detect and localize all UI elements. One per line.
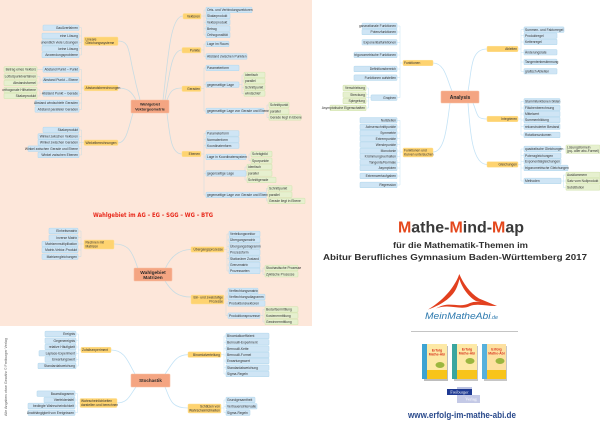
branch: Zufallsexperiment: Erwartungswert xyxy=(52,358,75,362)
branch: Ableiten: Summen- und Faktorregel xyxy=(525,28,564,32)
branch: Übergangsprozesse: Übergangsmatrix xyxy=(230,238,255,242)
branch: Punkte: Punkte xyxy=(190,48,200,52)
branch: Abstandsberechnungen: Lotfußpunktverfahren xyxy=(5,75,36,79)
branch: Schätzen von Wahrscheinlichkeiten: Schätzen von xyxy=(200,405,220,409)
logo: Freiburger Verlag xyxy=(447,387,480,403)
branch: Integrieren: Flächenberechnung xyxy=(525,106,554,110)
branch: Funktionen: Definitionsbereich xyxy=(370,67,396,71)
branch: Ebenen: Schnittgerade xyxy=(248,178,269,182)
branch: Integrieren: Stammfunktionen bilden xyxy=(525,99,561,103)
branch: Wahrscheinlichkeiten darstellen und berechnen: bedingte Wahrscheinlichkeit xyxy=(33,404,74,408)
icon: book 1: Erfolg xyxy=(432,348,442,352)
branch: Gleichungen: Exponentialgleichungen xyxy=(525,160,560,164)
branch: Ableiten: grafisch Ableiten xyxy=(525,69,549,73)
branch: Vektoren: Orts- und Verbindungsvektoren xyxy=(207,8,253,12)
mind map: Analysis xyxy=(322,23,600,190)
center node: Wahlgebiet Vektorgeometrie: Wahlgebiet xyxy=(140,103,161,107)
branch: Ein- und zweistufige Prozesse: Prozesse xyxy=(209,300,223,304)
branch: Ein- und zweistufige Prozesse xyxy=(191,288,298,325)
branch: Rechnen mit Matrizen: Matrix-Vektor-Produkt xyxy=(45,248,77,252)
branch: Funktionen und Kurven untersuchen: Wendepunkte xyxy=(376,143,396,147)
branch: Schätzen von Wahrscheinlichkeiten: Grundgesamtheit xyxy=(227,398,252,402)
branch: Ebenen: Schnittpunkt xyxy=(269,186,287,190)
logo: Freiburger Verlag: Verlag xyxy=(465,397,478,402)
branch: Lineare Gleichungssysteme: unendlich viele Lösungen xyxy=(41,41,78,45)
icon: book 3 xyxy=(482,344,507,381)
branch: Wahrscheinlichkeiten darstellen und berechnen: Baumdiagramm xyxy=(51,392,74,396)
icon: book 2: Mathe-Abi xyxy=(459,352,475,356)
branch: Rechnen mit Matrizen: Inverse Matrix xyxy=(56,236,77,240)
branch: Übergangsprozesse: Verteilungsvektor xyxy=(230,232,256,236)
branch: Funktionen und Kurven untersuchen: Nullstellen xyxy=(381,118,396,122)
branch: Funktionen xyxy=(322,23,433,111)
branch: Funktionen und Kurven untersuchen: Asymptoten xyxy=(379,166,396,170)
subtitle: line 2: Abitur Berufliches Gymnasium Baden-Württemberg 2017 xyxy=(323,253,588,262)
branch: Funktionen: Asymptotische Eigenschaften xyxy=(322,106,365,110)
branch: Punkte: Abstand zwischen Punkten xyxy=(207,55,247,59)
branch: Ein- und zweistufige Prozesse: Verflechtungsdiagramm xyxy=(229,295,264,299)
branch: Übergangsprozesse: Prozessarten xyxy=(230,269,250,273)
branch: Funktionen: trigonometrische Funktionen xyxy=(354,53,396,57)
branch: Winkelberechnungen: Skalarprodukt xyxy=(58,128,78,132)
branch: Funktionen und Kurven untersuchen: Achsenschnittpunkte xyxy=(366,125,396,129)
branch: Abstandsberechnungen: Abstandsberechnungen xyxy=(86,86,120,90)
branch: Schätzen von Wahrscheinlichkeiten: Wahrscheinlichkeiten xyxy=(189,409,220,413)
branch: Gleichungen: Lösungsformeln xyxy=(567,145,591,149)
branch: Übergangsprozesse: Stationärer Zustand xyxy=(230,257,259,261)
branch: Winkelberechnungen: Winkel zwischen Gerade und Ebene xyxy=(25,147,78,151)
center node: Wahlgebiet Vektorgeometrie xyxy=(131,100,169,113)
branch: Geraden: parallel xyxy=(245,79,256,83)
branch: Ebenen: Lage in Koordinatensystem xyxy=(207,155,247,159)
branch: Vektoren: Vektorprodukt xyxy=(207,20,227,24)
branch: Ebenen: identisch xyxy=(248,165,261,169)
branch: Ableiten: Ableiten xyxy=(505,47,517,51)
branch: Punkte: Lage im Raum xyxy=(207,42,229,46)
branch: Ein- und zweistufige Prozesse: Produktionsprozesse xyxy=(229,314,260,318)
branch: Integrieren: Rotationsvolumen xyxy=(525,133,552,137)
branch: Ebenen: Ebenen xyxy=(189,152,200,156)
branch: Geraden: Geraden xyxy=(187,87,200,91)
branch: Binomialverteilung: Erwartungswert xyxy=(227,359,250,363)
center node: Analysis xyxy=(441,91,479,103)
branch: Rechnen mit Matrizen: Matrizen xyxy=(86,245,98,249)
branch: Funktionen und Kurven untersuchen: Extremwertaufgaben xyxy=(366,174,396,178)
branch: Ebenen: gegenseitige Lage xyxy=(207,172,234,176)
branch: Lineare Gleichungssysteme xyxy=(41,25,118,58)
center node: Wahlgebiet Vektorgeometrie: Vektorgeometrie xyxy=(135,107,165,111)
branch: Ebenen xyxy=(182,131,305,204)
branch: Lineare Gleichungssysteme: Lineare xyxy=(86,37,97,41)
branch: Rechnen mit Matrizen: Einheitsmatrix xyxy=(56,229,77,233)
logo: Freiburger Verlag: Freiburger xyxy=(450,390,469,395)
branch: Funktionen: Streckung xyxy=(350,93,365,97)
branch: Integrieren: rekonstruierter Bestand xyxy=(525,125,559,129)
branch: Übergangsprozesse: Zyklische Prozesse xyxy=(266,272,295,276)
branch: Ableiten: Kettenregel xyxy=(525,40,542,44)
branch: Abstandsberechnungen: Abstand Punkt – Ebene xyxy=(43,78,78,82)
branch: Abstandsberechnungen: Abstand paralleler Geraden xyxy=(38,108,78,112)
branch: Geraden: gegenseitige Lage xyxy=(207,83,234,87)
branch: Funktionen und Kurven untersuchen: Krümmungsverhalten xyxy=(365,154,396,158)
branch: Ebenen: Normalenform xyxy=(207,138,228,142)
mind map: Wahlgebiet Matrizen xyxy=(42,228,301,325)
branch: Integrieren: Integrieren xyxy=(501,117,517,121)
branch: Winkelberechnungen: Winkel zwischen Geraden xyxy=(40,141,78,145)
branch: Vektoren: Betrag xyxy=(207,27,217,31)
branch: Wahrscheinlichkeiten darstellen und berechnen: Vierfeldertafel xyxy=(54,398,74,402)
branch: Lineare Gleichungssysteme: keine Lösung xyxy=(58,47,78,51)
center node: Stochastik: Stochastik xyxy=(139,378,162,383)
branch: Abstandsberechnungen xyxy=(2,67,120,112)
center node: Wahlgebiet Matrizen xyxy=(134,268,172,281)
branch: Geraden: parallel xyxy=(270,110,281,114)
logo: MeinMatheAbi: MeinMatheAbi .de xyxy=(425,311,498,322)
branch: Geraden: identisch xyxy=(245,73,258,77)
branch: Ebenen: parallel xyxy=(269,193,280,197)
branch: Übergangsprozesse: Stochastische Prozesse xyxy=(266,266,301,270)
branch: Binomialverteilung: Bernoulli-Kette xyxy=(227,347,249,351)
branch: Lineare Gleichungssysteme: Gleichungssysteme xyxy=(86,41,114,45)
branch: Winkelberechnungen: Winkel zwischen Ebenen xyxy=(41,153,78,157)
branch: Ebenen: Parameterform xyxy=(207,132,229,136)
branch: Funktionen: Graphen xyxy=(383,96,396,100)
branch: Funktionen und Kurven untersuchen: Extrempunkte xyxy=(376,137,396,141)
branch: Funktionen: Spiegelung xyxy=(348,99,365,103)
branch: Schätzen von Wahrscheinlichkeiten: Vertrauensintervalle xyxy=(227,404,256,408)
branch: Zufallsexperiment: Zufallsexperiment xyxy=(82,348,108,352)
branch: Abstandsberechnungen: orthogonale Hilfsebene xyxy=(2,88,36,92)
mind map: Stochastik xyxy=(27,331,269,415)
note: vertical disclaimer: Alle Angaben ohne Gewähr © Freiburger Verlag xyxy=(4,338,8,416)
branch: Abstandsberechnungen: Abstandsformel xyxy=(13,81,36,85)
branch: Abstandsberechnungen: Skalarprodukt xyxy=(16,94,36,98)
branch: Abstandsberechnungen: Abstand windschiefe Geraden xyxy=(34,101,78,105)
branch: Lineare Gleichungssysteme: Gaußverfahren xyxy=(56,26,78,30)
branch: Schätzen von Wahrscheinlichkeiten xyxy=(188,397,257,415)
branch: Winkelberechnungen xyxy=(25,127,118,158)
icon: book 3: Erfolg xyxy=(491,348,502,352)
branch: Funktionen: Exponentialfunktionen xyxy=(364,40,396,44)
branch: Binomialverteilung: Binomialkoeffizient xyxy=(227,334,255,338)
branch: Ebenen: parallel xyxy=(248,172,259,176)
branch: Gleichungen: Satz vom Nullprodukt xyxy=(567,179,598,183)
branch: Binomialverteilung: Sigma-Regeln xyxy=(227,372,248,376)
branch: Abstandsberechnungen: Abstand Punkt – Gerade xyxy=(42,92,78,96)
branch: Binomialverteilung: Binomialverteilung xyxy=(193,353,220,357)
icon: book 2 xyxy=(452,344,478,381)
branch: Rechnen mit Matrizen: Matrizengleichungen xyxy=(47,255,77,259)
branch: Gleichungen: Substitution xyxy=(567,186,584,190)
branch: Funktionen und Kurven untersuchen xyxy=(360,118,434,188)
branch: Integrieren: Mittelwert xyxy=(525,112,539,116)
branch: Vektoren xyxy=(183,7,253,38)
mind map: Wahlgebiet Vektorgeometrie xyxy=(2,7,305,204)
center node: Wahlgebiet Matrizen: Matrizen xyxy=(143,275,163,281)
branch: Ableiten: Tangentenbestimmung xyxy=(525,60,559,64)
branch: Ein- und zweistufige Prozesse: Ein- und zweistufige xyxy=(193,296,223,300)
branch: Ableiten: Produktregel xyxy=(525,34,544,38)
branch: Ebenen: Gerade liegt in Ebene xyxy=(269,199,301,203)
branch: Funktionen: Funktionen xyxy=(404,61,420,65)
branch: Gleichungen xyxy=(487,145,600,190)
icon: book 2: Erfolg xyxy=(462,348,472,352)
panel: peach background xyxy=(0,0,312,326)
branch: Geraden xyxy=(182,65,302,120)
branch: Vektoren: Skalarprodukt xyxy=(207,14,227,18)
branch: Gleichungen: Ausklammern xyxy=(567,173,587,177)
branch: Vektoren: Vektoren xyxy=(187,14,200,18)
icon: book 1 xyxy=(422,344,448,381)
branch: Ein- und zweistufige Prozesse: Bedarfsermittlung xyxy=(266,308,292,312)
branch: Ebenen: gegenseitige Lage von Gerade und Ebene xyxy=(207,193,269,197)
branch: Binomialverteilung xyxy=(188,333,269,377)
branch: Winkelberechnungen: Winkel zwischen Vektoren xyxy=(40,135,78,139)
branch: Übergangsprozesse: Übergangsdiagramm xyxy=(230,244,261,248)
divider xyxy=(411,331,518,332)
branch: Funktionen: Potenzfunktionen xyxy=(371,30,396,34)
branch: Funktionen und Kurven untersuchen: Symmetrie xyxy=(380,131,396,135)
branch: Funktionen und Kurven untersuchen: Kurven untersuchen xyxy=(404,153,434,157)
icon: book 3: Mathe-Abi xyxy=(488,352,505,356)
branch: Zufallsexperiment: Gegenereignis xyxy=(54,339,75,343)
center node: Wahlgebiet Matrizen: Wahlgebiet xyxy=(140,270,166,276)
heading: Wahlgebiet: Wahlgebiet im AG – EG – SGG – WG – BTG xyxy=(93,212,213,219)
center node: Analysis: Analysis xyxy=(450,95,470,101)
branch: Geraden: gegenseitige Lage von Gerade und Ebene xyxy=(207,109,269,113)
branch: Ein- und zweistufige Prozesse: Produktionsvektoren xyxy=(229,302,259,306)
branch: Ebenen: Koordinatenform xyxy=(207,144,232,148)
branch: Funktionen: Funktionen aufstellen xyxy=(365,76,396,80)
branch: Zufallsexperiment: Laplace-Experiment xyxy=(46,351,75,355)
branch: Gleichungen: Potenzgleichungen xyxy=(525,154,553,158)
branch: Ebenen: Schrägbild xyxy=(252,152,268,156)
branch: Winkelberechnungen: Winkelberechnungen xyxy=(86,141,117,145)
branch: Abstandsberechnungen: Betrag eines Vektors xyxy=(6,68,36,72)
branch: Schätzen von Wahrscheinlichkeiten: Sigma-Regeln xyxy=(227,411,248,415)
branch: Geraden: Schnittpunkt xyxy=(245,85,263,89)
branch: Binomialverteilung: Bernoulli-Formel xyxy=(227,353,251,357)
branch: Funktionen und Kurven untersuchen: Monotonie xyxy=(381,149,396,153)
branch: Funktionen und Kurven untersuchen: Funktionen und xyxy=(404,149,427,153)
title: Mathe-Mind-Map: Mathe-Mind-Map xyxy=(398,220,524,236)
branch: Rechnen mit Matrizen: Rechnen mit xyxy=(86,241,104,245)
branch: Zufallsexperiment: Ereignis xyxy=(63,332,75,336)
branch: Ein- und zweistufige Prozesse: Verflechtungsmatrix xyxy=(229,289,258,293)
branch: Übergangsprozesse: Prozessform xyxy=(230,251,249,255)
branch: Geraden: Gerade liegt in Ebene xyxy=(270,116,302,120)
branch: Gleichungen: trigonometrische Gleichungen xyxy=(525,166,569,170)
branch: Lineare Gleichungssysteme: Anwendungsprobleme xyxy=(45,53,78,57)
branch: Geraden: windschief xyxy=(245,92,260,96)
branch: Funktionen: ganzrationale Funktionen xyxy=(359,24,396,28)
branch: Ebenen: Spurpunkte xyxy=(252,159,269,163)
branch: Gleichungen: Gleichungen xyxy=(498,163,517,167)
branch: Ein- und zweistufige Prozesse: Gewinnermittlung xyxy=(266,320,292,324)
branch: Integrieren: Summenbildung xyxy=(525,118,549,122)
branch: Zufallsexperiment: Standardabweichung xyxy=(44,364,75,368)
logo: MeinMatheAbi xyxy=(425,274,498,322)
icon: book 1: Mathe-Abi xyxy=(429,352,445,356)
branch: Wahrscheinlichkeiten darstellen und berechnen: Unabhängigkeit von Ereignissen xyxy=(27,411,74,415)
branch: Ein- und zweistufige Prozesse: Kostenermittlung xyxy=(266,314,291,318)
branch: Vektoren: Orthogonalität xyxy=(207,33,228,37)
branch: Binomialverteilung: Bernoulli-Experiment xyxy=(227,340,258,344)
branch: Übergangsprozesse: Übergangsprozesse xyxy=(193,248,223,252)
branch: Binomialverteilung: Standardabweichung xyxy=(227,366,258,370)
branch: Geraden: Parameterform xyxy=(207,66,229,70)
branch: Lineare Gleichungssysteme: eine Lösung xyxy=(60,34,78,38)
branch: Wahrscheinlichkeiten darstellen und berechnen: darstellen und berechnen xyxy=(81,403,118,407)
branch: Abstandsberechnungen: Abstand Punkt – Punkt xyxy=(44,68,78,72)
branch: Zufallsexperiment xyxy=(38,331,111,369)
branch: Rechnen mit Matrizen: Matrizenmultiplikation xyxy=(45,242,77,246)
branch: Zufallsexperiment: relative Häufigkeit xyxy=(49,345,75,349)
branch: Geraden: Schnittpunkt xyxy=(270,103,288,107)
subtitle: line 1: für die Mathematik-Themen im xyxy=(393,241,528,250)
branch: Integrieren xyxy=(487,98,561,138)
branch: Funktionen und Kurven untersuchen: Tangente/Normale xyxy=(369,160,396,164)
branch: Ableiten xyxy=(487,27,564,74)
branch: Punkte xyxy=(182,41,247,59)
branch: Übergangsprozesse xyxy=(191,231,301,277)
url: www.erfolg-im-mathe-abi.de xyxy=(407,410,516,421)
branch: Gleichungen: quadratische Gleichungen xyxy=(525,147,563,151)
branch: Rechnen mit Matrizen xyxy=(42,228,114,259)
center node: Stochastik xyxy=(131,374,170,387)
branch: Funktionen und Kurven untersuchen: Regression xyxy=(379,183,396,187)
branch: Funktionen: Verschiebung xyxy=(345,86,365,90)
branch: Wahrscheinlichkeiten darstellen und berechnen xyxy=(27,391,118,415)
branch: Ableiten: Änderungsrate xyxy=(525,50,547,54)
branch: Gleichungen: (pq- oder abc-Formel) xyxy=(567,149,599,153)
branch: Übergangsprozesse: Grenzmatrix xyxy=(230,263,248,267)
branch: Wahrscheinlichkeiten darstellen und berechnen: Wahrscheinlichkeiten xyxy=(81,399,112,403)
branch: Gleichungen: Methoden xyxy=(525,179,540,183)
